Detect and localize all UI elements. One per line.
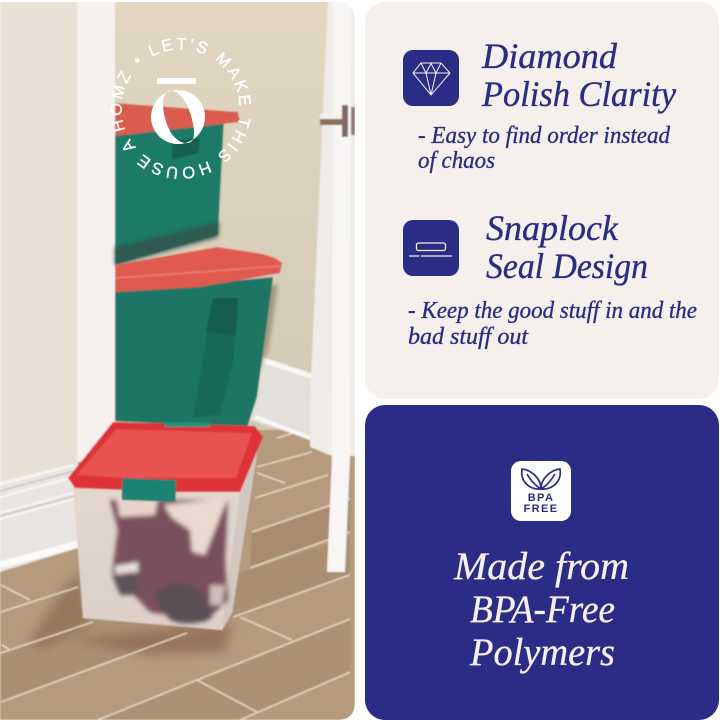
photo: back wall [114,0,330,430]
logo: bar [157,78,196,84]
panel: BPA free [365,405,719,720]
text: order benefit: of chaos [418,148,495,174]
text: order benefit: - Easy to find order instead [418,123,671,149]
photo: shadow behind middle bin [258,285,278,372]
icon: BPA free badge: BPA [528,492,554,504]
photo: door frame left [77,0,115,462]
icon: BPA free badge: FREE [524,503,558,515]
photo: right baseboard [250,355,314,440]
photo: top green bin [115,103,240,265]
photo: door frame and door leaf [310,0,355,720]
panel: product photo [0,2,355,720]
logo: circular slogan: • LET'S MAKE THIS HOUSE A HOMZ [110,38,251,180]
photo: middle green bin [115,247,282,428]
icon: diamond [403,50,459,106]
logo: letter O [151,90,205,144]
heading: snaplock seal design: Snaplock [486,208,619,248]
text: seal benefit: - Keep the good stuff in and the [408,298,697,324]
heading: diamond polish clarity: Diamond [481,36,618,76]
heading: diamond polish clarity: Polish Clarity [481,74,676,114]
heading: snaplock seal design: Seal Design [486,246,648,286]
heading: made from BPA-free polymers: Made from [453,545,629,588]
panel: features [365,2,719,399]
photo: door handle [320,105,355,137]
heading: made from BPA-free polymers: Polymers [469,631,615,674]
icon: BPA free badge [511,461,571,521]
heading: made from BPA-free polymers: BPA-Free [470,588,615,631]
photo: left wall and baseboard [0,0,78,572]
photo: clear bin with red lid [68,422,263,630]
logo badge [110,38,251,180]
text: seal benefit: bad stuff out [408,324,529,350]
photo: floor [0,420,355,720]
icon: snaplock seal [403,220,459,276]
